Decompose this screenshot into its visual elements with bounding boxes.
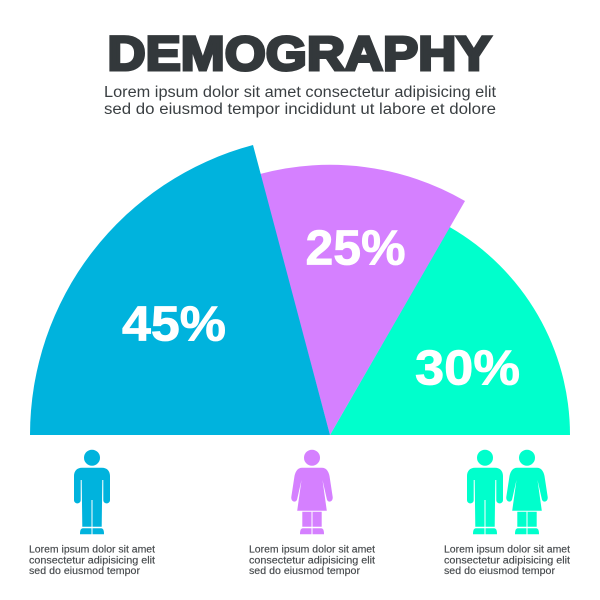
caption: women: consectetur adipisicing elit (249, 556, 375, 566)
title: DEMOGRAPHY (108, 28, 492, 81)
subtitle: sed do eiusmod tempor incididunt ut labore et dolore (104, 101, 496, 118)
segment: 25% purple (260, 165, 465, 435)
subtitle: Lorem ipsum dolor sit amet consectetur adipisicing elit (104, 84, 497, 101)
subtitle (104, 84, 497, 118)
icon: couple (467, 450, 548, 535)
caption: men: consectetur adipisicing elit (29, 556, 155, 566)
caption: couples: consectetur adipisicing elit (444, 556, 570, 566)
segment: 45% blue (30, 145, 330, 435)
semicircle chart (30, 145, 570, 435)
caption: couples: sed do eiusmod tempor (444, 566, 556, 577)
caption: women (249, 544, 375, 577)
caption: men: Lorem ipsum dolor sit amet (29, 544, 155, 556)
caption: couples (444, 544, 570, 577)
caption: women: Lorem ipsum dolor sit amet (249, 544, 375, 556)
label: 25%: 25% (306, 222, 406, 276)
label: 45%: 45% (122, 297, 226, 351)
icon: man (74, 450, 110, 535)
caption: couples: Lorem ipsum dolor sit amet (444, 544, 570, 556)
caption: women: sed do eiusmod tempor (249, 566, 361, 577)
segment: 30% teal (330, 227, 570, 435)
icon: woman (291, 450, 333, 535)
caption: men: sed do eiusmod tempor (29, 566, 141, 577)
label: 30%: 30% (415, 342, 520, 396)
caption: men (29, 544, 155, 577)
